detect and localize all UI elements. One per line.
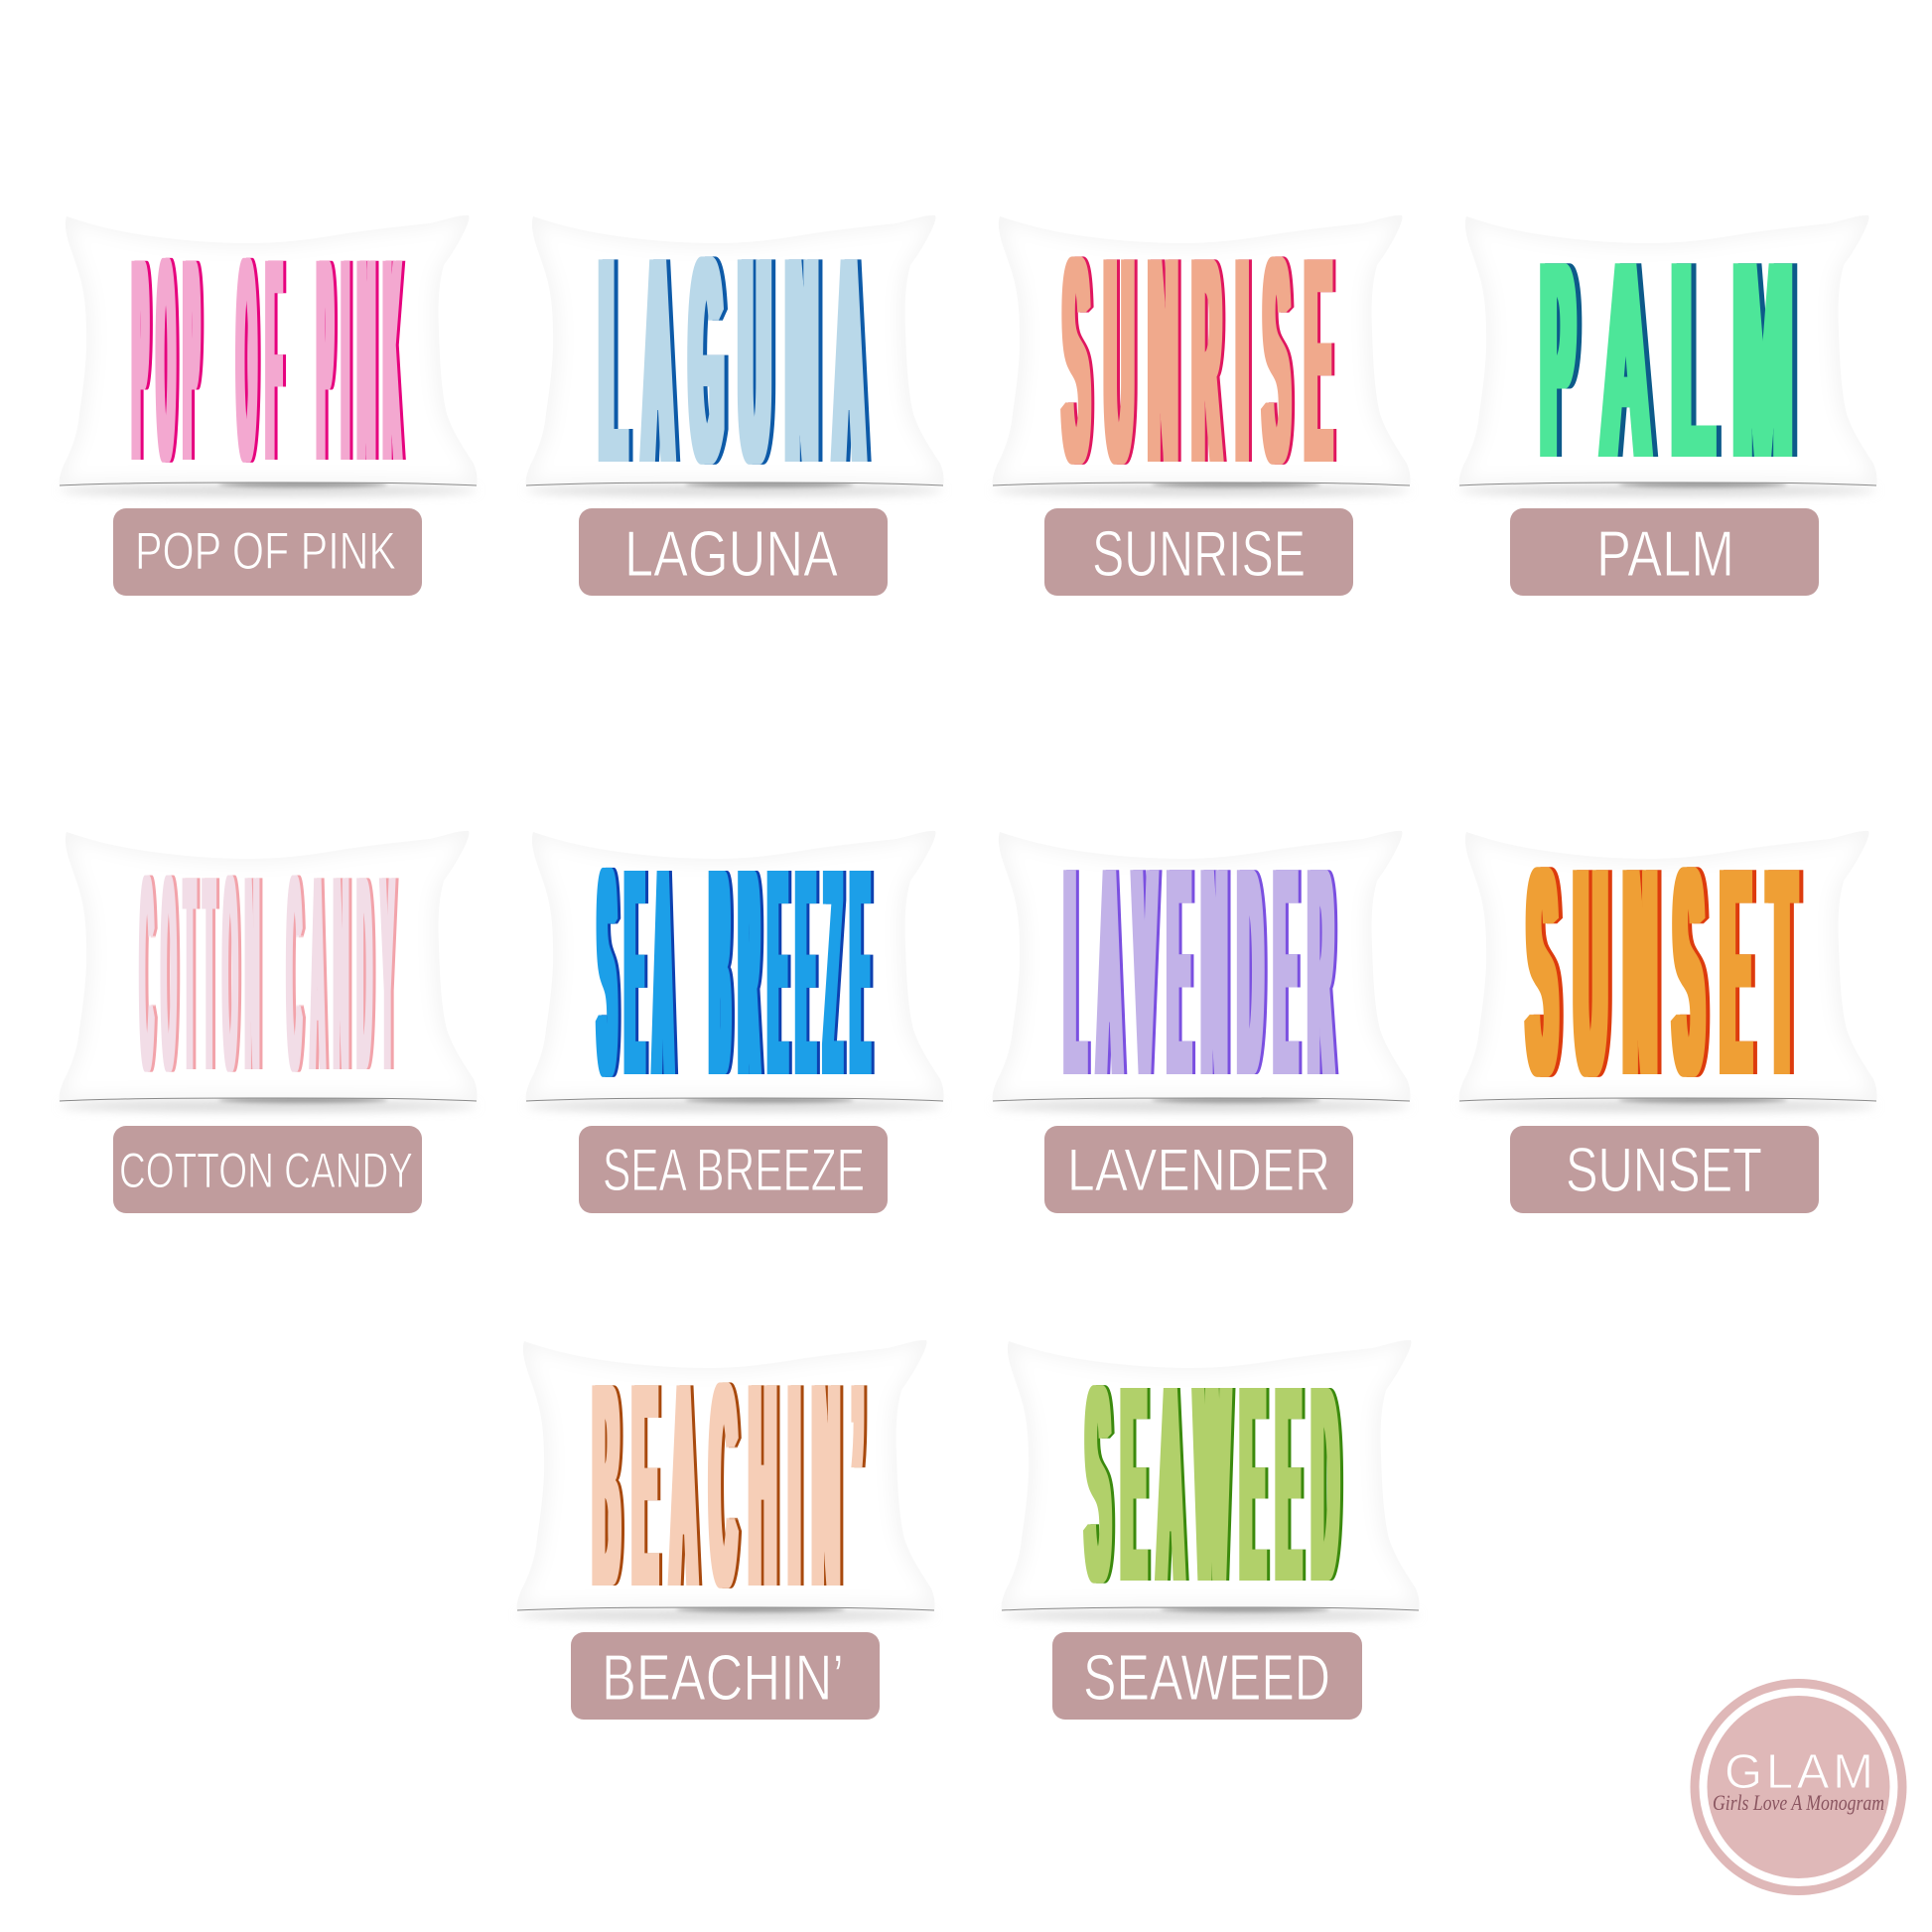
label: beachin: BEACHIN’ (602, 1641, 844, 1714)
text: PINK (318, 199, 410, 521)
logo: GLAM badge (1690, 1679, 1906, 1895)
label: palm: PALM (1596, 517, 1734, 590)
text: POP (136, 199, 211, 521)
pillow: beachin (517, 1323, 935, 1648)
label: sunset: SUNSET (1566, 1136, 1762, 1205)
label: seaweed (1052, 1632, 1362, 1720)
pillow: pop of pink (60, 199, 478, 521)
text: PINK (321, 199, 413, 521)
label: pop of pink (113, 508, 422, 596)
logo: GLAM badge: Girls Love A Monogram (1713, 1790, 1884, 1815)
pillow: seaweed (1002, 1327, 1420, 1640)
label: sea breeze (579, 1126, 888, 1213)
pillow: palm: P (1542, 203, 1574, 516)
text: OF (237, 199, 292, 521)
pillow: palm: A (1606, 203, 1655, 516)
pillow: palm: L (1672, 203, 1714, 516)
label: sunrise (1044, 508, 1353, 596)
label: lavender (1044, 1126, 1353, 1213)
text: OF (240, 199, 295, 521)
label: sunset (1510, 1126, 1819, 1213)
pillow: palm (1459, 203, 1877, 516)
label: lavender: LAVENDER (1067, 1137, 1330, 1203)
text: POP (133, 199, 208, 521)
label: seaweed: SEAWEED (1083, 1641, 1330, 1714)
pillow: palm: P (1547, 203, 1579, 516)
text: SEA (599, 807, 683, 1138)
pillow: cotton candy (60, 819, 478, 1129)
text: CANDY (287, 819, 403, 1129)
pillow: lavender (993, 806, 1411, 1138)
pillow: laguna (526, 196, 944, 524)
pillow: palm: A (1601, 203, 1650, 516)
label: sunrise: SUNRISE (1092, 517, 1306, 590)
text: SEA (602, 807, 686, 1138)
label: laguna: LAGUNA (624, 517, 839, 590)
text: CANDY (290, 819, 406, 1129)
label: sea breeze: SEA BREEZE (603, 1137, 865, 1203)
label: cotton candy (113, 1126, 422, 1213)
pillow: palm: L (1677, 203, 1719, 516)
logo: GLAM badge: GLAM (1725, 1745, 1873, 1799)
label: palm (1510, 508, 1819, 596)
pillow: sunrise (993, 196, 1411, 524)
pillow: sea breeze (526, 807, 944, 1138)
label: pop of pink: POP OF PINK (135, 522, 396, 581)
label: cotton candy: COTTON CANDY (119, 1143, 413, 1198)
